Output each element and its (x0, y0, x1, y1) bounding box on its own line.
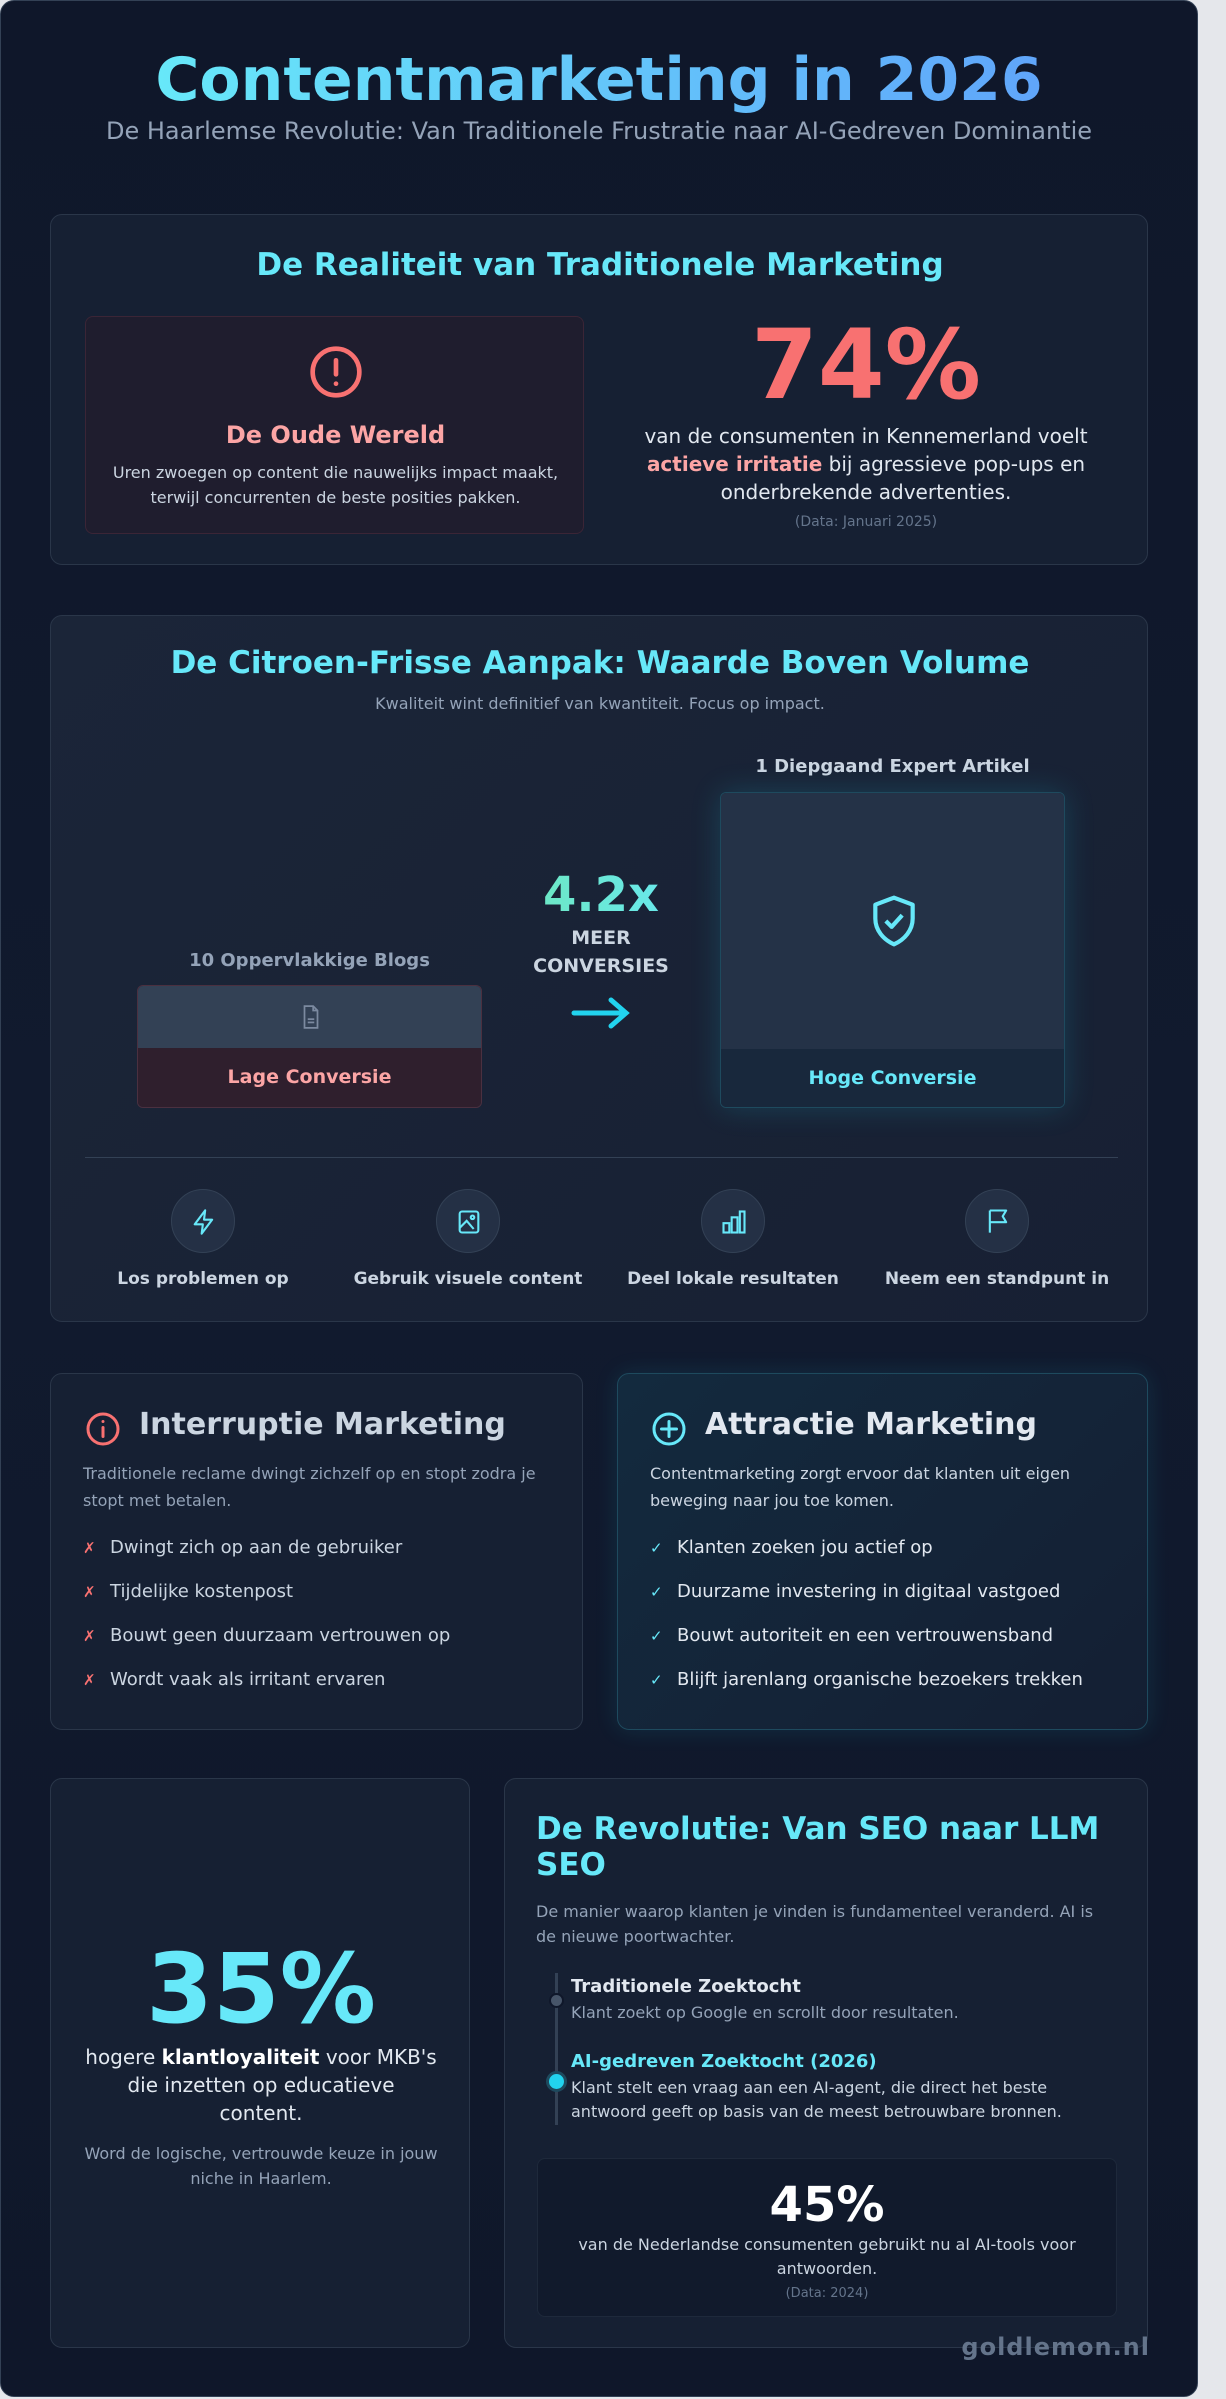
multiplier 4.2x: CONVERSIES (533, 955, 669, 977)
multiplier 4.2x (533, 867, 669, 977)
icon: document (304, 1005, 318, 1029)
right comparison: expert article: 1 Diepgaand Expert Artikel (755, 756, 1030, 777)
list: negatives: Dwingt zich op aan de gebruiker (110, 1537, 402, 1558)
list: negatives: ✗ (83, 1671, 96, 1689)
heading: De Citroen-Frisse Aanpak: Waarde Boven Volume (171, 645, 1029, 681)
timeline item: AI: AI-gedreven Zoektocht (2026) (571, 2051, 877, 2072)
list: negatives: ✗ (83, 1583, 96, 1601)
list: positives: Klanten zoeken jou actief op (677, 1537, 933, 1558)
tip: gebruik visuele content: Gebruik visuele content (354, 1269, 582, 1289)
description: Contentmarketing zorgt ervoor dat klanten uit eigen beweging naar jou toe komen. (650, 1464, 1070, 1510)
list: negatives (83, 1537, 450, 1690)
stat text: die inzetten op educatieve (127, 2073, 395, 2097)
timeline item: traditional (549, 1976, 959, 2022)
stat text (85, 2045, 437, 2125)
list: negatives: ✗ (83, 1539, 96, 1557)
list: positives: Bouwt autoriteit en een vertrouwensband (677, 1625, 1053, 1646)
icon: alert circle (310, 346, 362, 398)
tip: deel lokale resultaten (627, 1189, 839, 1289)
tip: neem een standpunt in: Neem een standpunt in (885, 1269, 1109, 1289)
heading: De Revolutie: Van SEO naar LLM SEO (536, 1811, 1099, 1883)
list: positives: ✓ (650, 1583, 663, 1601)
small note: Word de logische, vertrouwde keuze in jouw niche in Haarlem. (84, 2144, 438, 2188)
left comparison: 10 blogs: Lage Conversie (228, 1066, 391, 1088)
left comparison: 10 blogs: 10 Oppervlakkige Blogs (189, 950, 430, 971)
list: positives: ✓ (650, 1671, 663, 1689)
list: positives: ✓ (650, 1539, 663, 1557)
watermark: goldlemon.nl (961, 2333, 1150, 2361)
tip: deel lokale resultaten: Deel lokale resultaten (627, 1269, 839, 1289)
panel: citroen-frisse aanpak (50, 615, 1148, 1322)
list: positives (650, 1537, 1083, 1690)
big number: 74% (751, 309, 981, 421)
panel: interruptie marketing (50, 1373, 583, 1730)
list: negatives: Bouwt geen duurzaam vertrouwen op (110, 1625, 450, 1646)
stat text: hogere klantloyaliteit voor MKB's (85, 2045, 437, 2069)
list: negatives: Wordt vaak als irritant ervaren (110, 1669, 385, 1690)
description: De manier waarop klanten je vinden is fundamenteel veranderd. AI is de nieuwe poortwachter. (536, 1902, 1093, 1946)
panel: attractie marketing (617, 1373, 1148, 1730)
tip: gebruik visuele content (354, 1189, 582, 1289)
timeline (546, 1973, 1062, 2125)
right comparison: expert article: Hoge Conversie (809, 1067, 976, 1089)
icon: shield check (873, 896, 915, 946)
heading: De Realiteit van Traditionele Marketing (256, 247, 944, 283)
stat box 45%: (Data: 2024) (786, 2286, 868, 2301)
stat box 45%: 45% (770, 2177, 884, 2233)
source: (Data: Januari 2025) (795, 514, 937, 530)
timeline item: AI (546, 2051, 1062, 2121)
panel: traditional marketing reality (50, 214, 1148, 565)
multiplier 4.2x: 4.2x (543, 867, 659, 923)
subtitle: De Haarlemse Revolutie: Van Traditionele Frustratie naar AI-Gedreven Dominantie (106, 117, 1092, 145)
stat box 45% (537, 2158, 1117, 2317)
description: Traditionele reclame dwingt zichzelf op en stopt zodra je stopt met betalen. (83, 1464, 536, 1510)
tip: neem een standpunt in (885, 1189, 1109, 1289)
multiplier 4.2x: MEER (571, 927, 631, 949)
old world title: De Oude Wereld (226, 421, 445, 449)
list: negatives: ✗ (83, 1627, 96, 1645)
tips row (117, 1189, 1109, 1289)
tip: los problemen op (117, 1189, 289, 1289)
list: positives: Duurzame investering in digitaal vastgoed (677, 1581, 1060, 1602)
stat text: content. (220, 2101, 302, 2125)
subheading: Kwaliteit wint definitief van kwantiteit. Focus op impact. (375, 694, 825, 713)
big number: 35% (146, 1933, 376, 2045)
stat 74% (644, 309, 1088, 530)
right comparison: expert article (711, 756, 1074, 1117)
old world box (85, 316, 584, 534)
old world description: Uren zwoegen op content die nauwelijks impact maakt, terwijl concurrenten de beste posities pakken. (113, 463, 558, 507)
stat text: van de consumenten in Kennemerland voelt actieve irritatie bij agressieve pop-ups en onderbrekende advertenties. (644, 424, 1088, 504)
panel: 35% loyalty stat (50, 1778, 470, 2348)
list: negatives: Tijdelijke kostenpost (110, 1581, 293, 1602)
heading with icon: Attractie Marketing (705, 1407, 1037, 1442)
tip: los problemen op: Los problemen op (117, 1269, 289, 1289)
title: Contentmarketing in 2026 (155, 45, 1043, 115)
list: positives: Blijft jarenlang organische bezoekers trekken (677, 1669, 1083, 1690)
list: positives: ✓ (650, 1627, 663, 1645)
left comparison: 10 blogs (137, 950, 482, 1108)
timeline item: traditional: Klant zoekt op Google en scrollt door resultaten. (571, 2003, 959, 2022)
panel: SEO to LLM SEO (504, 1778, 1148, 2348)
timeline item: traditional: Traditionele Zoektocht (571, 1976, 801, 1997)
heading with icon: Interruptie Marketing (139, 1407, 506, 1442)
timeline item: AI: Klant stelt een vraag aan een AI-agent, die direct het beste antwoord geeft op basis van de meest betrouwbare bronnen. (571, 2078, 1062, 2121)
arrow (572, 998, 630, 1028)
stat box 45%: van de Nederlandse consumenten gebruikt nu al AI-tools voor antwoorden. (578, 2235, 1076, 2278)
